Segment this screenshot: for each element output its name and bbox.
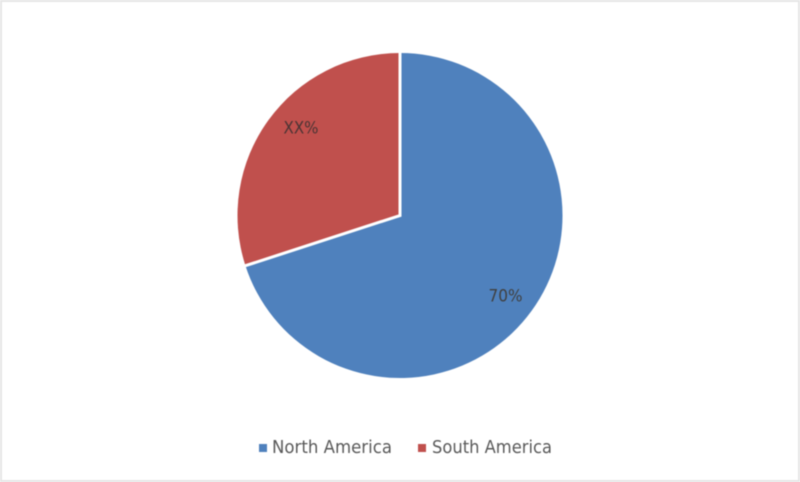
slice: North America 70% — [245, 53, 563, 378]
legend — [259, 438, 552, 458]
slice: South America XX% — [238, 53, 400, 266]
data label: 70%: 70% — [488, 286, 522, 306]
legend item: South America: South America — [432, 438, 552, 458]
data label: XX%: XX% — [284, 118, 318, 138]
legend item: North America: North America — [272, 438, 392, 458]
pie chart — [238, 52, 563, 378]
